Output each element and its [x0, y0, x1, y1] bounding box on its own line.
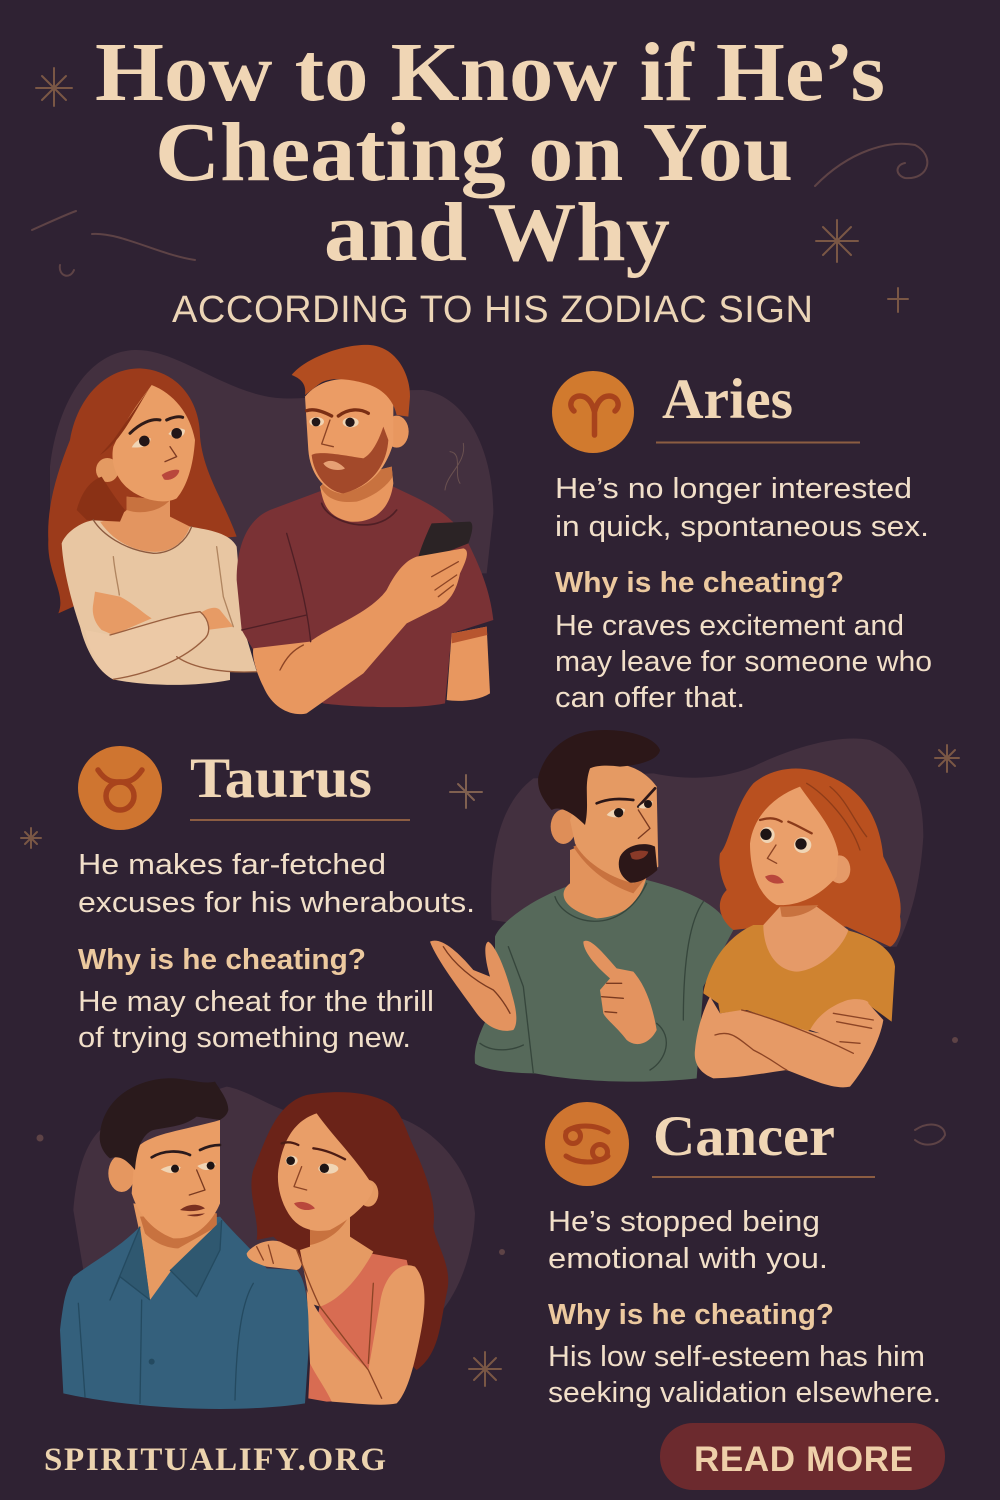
reason text	[555, 610, 932, 714]
icon: Cancer sign	[545, 1102, 629, 1186]
icon: Taurus sign	[78, 746, 162, 830]
panel: Cancer	[545, 1102, 941, 1409]
sign text	[555, 473, 929, 543]
panel: Taurus	[78, 746, 475, 1054]
reason text: seeking validation elsewhere.	[548, 1377, 941, 1409]
button: read more	[660, 1423, 945, 1490]
heading: Cancer: Cancer	[653, 1105, 835, 1168]
reason text	[548, 1341, 941, 1409]
title: and Why	[324, 186, 670, 279]
title	[95, 26, 885, 279]
panel: Aries	[552, 368, 932, 714]
sign text: in quick, spontaneous sex.	[555, 511, 929, 543]
icon: Aries sign	[552, 371, 634, 453]
footer: site name: SPIRITUALIFY.ORG	[44, 1442, 386, 1478]
subheading: Why is he cheating?	[555, 567, 844, 599]
title: How to Know if He’s	[95, 26, 885, 119]
reason text: He craves excitement and	[555, 610, 904, 642]
illustration: Aries couple	[48, 345, 493, 714]
sign text: excuses for his wherabouts.	[78, 887, 475, 919]
title: Cheating on You	[155, 106, 793, 199]
subheading: Why is he cheating?	[78, 944, 366, 976]
reason text: may leave for someone who	[555, 646, 932, 678]
sign text: He’s stopped being	[548, 1206, 820, 1238]
reason text: He may cheat for the thrill	[78, 986, 434, 1018]
reason text: His low self-esteem has him	[548, 1341, 925, 1373]
sign text: He makes far-fetched	[78, 849, 386, 881]
heading: Taurus: Taurus	[190, 747, 372, 810]
reason text: can offer that.	[555, 682, 745, 714]
illustration: Taurus couple	[430, 730, 923, 1087]
button: read more: READ MORE	[694, 1440, 913, 1479]
sign text	[78, 849, 475, 919]
reason text: of trying something new.	[78, 1022, 411, 1054]
heading: Aries: Aries	[662, 368, 793, 431]
reason text	[78, 986, 434, 1054]
sign text: emotional with you.	[548, 1243, 828, 1275]
subheading: Why is he cheating?	[548, 1299, 834, 1331]
illustration: Cancer couple	[60, 1078, 475, 1409]
sign text	[548, 1206, 828, 1275]
sign text: He’s no longer interested	[555, 473, 912, 505]
subtitle: ACCORDING TO HIS ZODIAC SIGN	[172, 289, 813, 331]
